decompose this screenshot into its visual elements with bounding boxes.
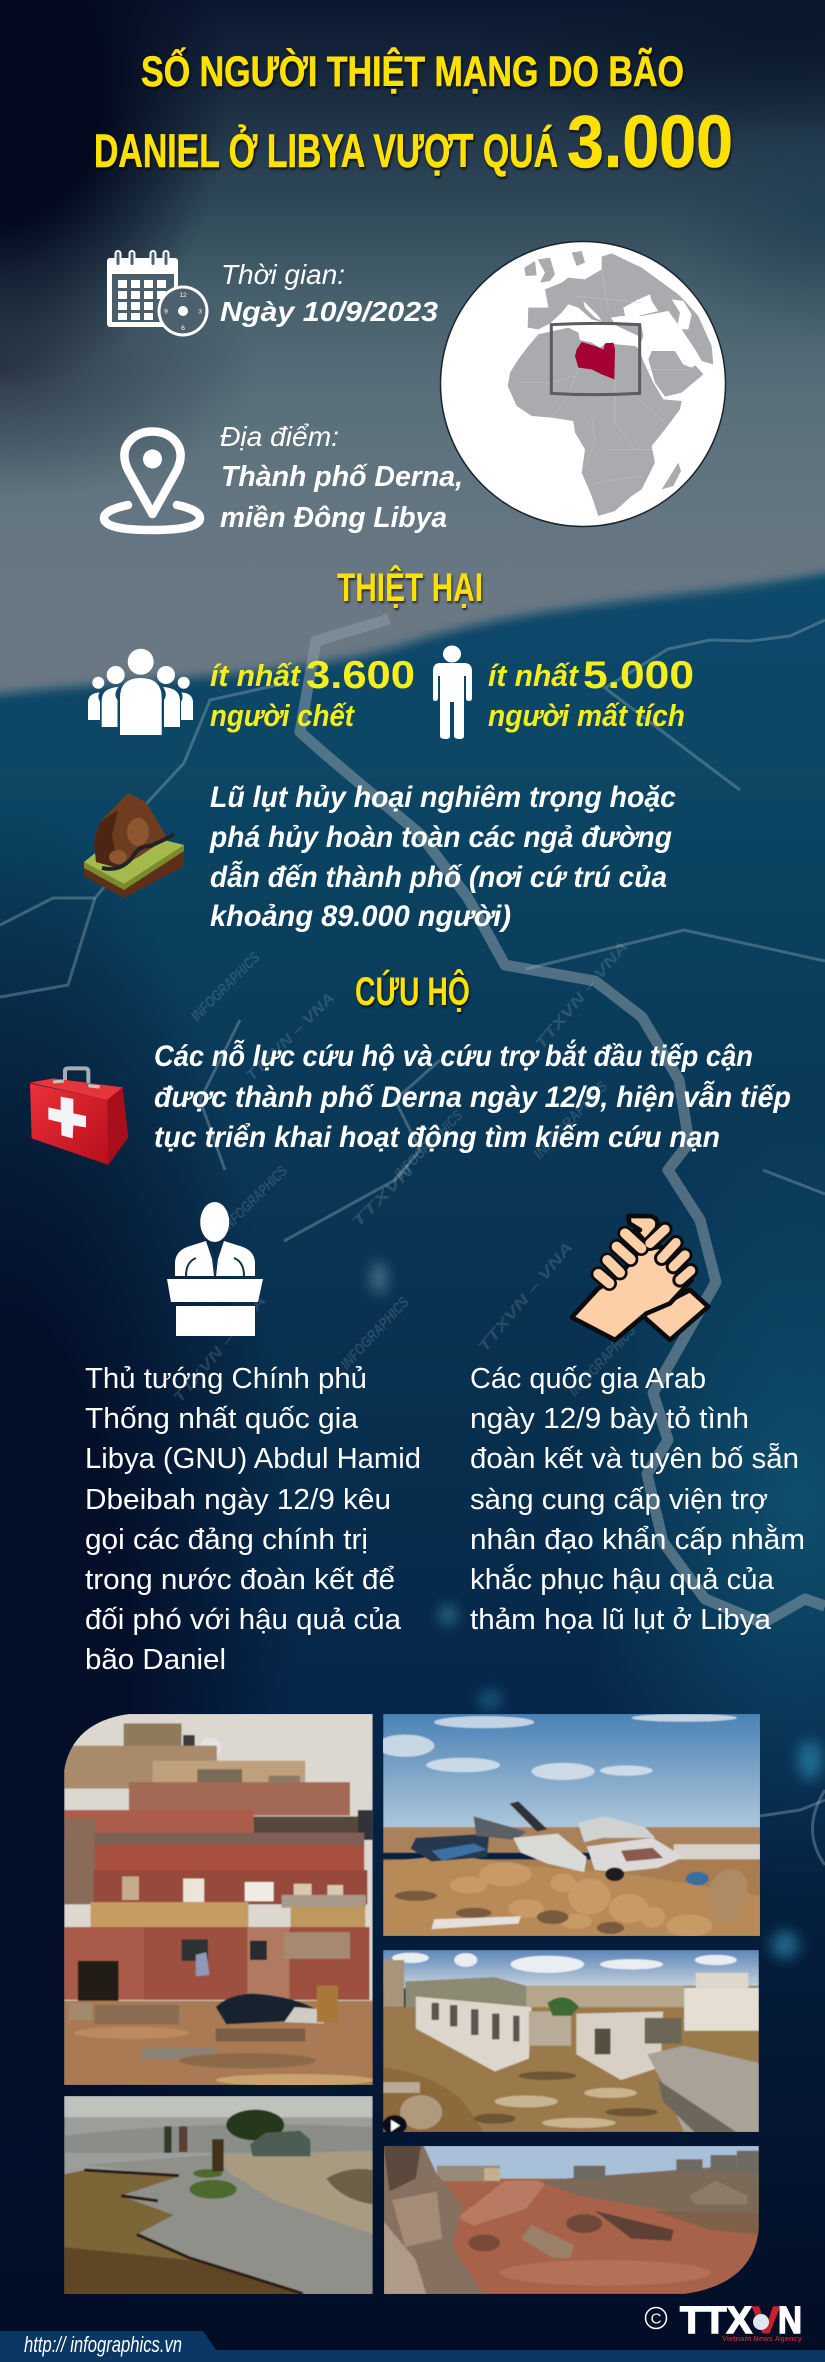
text: time: Thời gian: bbox=[221, 259, 345, 290]
icon: speaker at podium bbox=[167, 1202, 263, 1336]
photo: muddy river of debris bbox=[384, 2146, 759, 2294]
title: DANIEL Ở LIBYA VƯỢT QUÁ bbox=[94, 124, 558, 177]
icon: calendar and clock: 3 bbox=[198, 308, 202, 316]
text: damage description: khoảng 89.000 người) bbox=[210, 900, 511, 933]
text: prime minister statement: bão Daniel bbox=[85, 1644, 226, 1676]
text: time bbox=[220, 259, 438, 327]
text: time: Ngày 10/9/2023 bbox=[220, 296, 438, 327]
text: rescue description: Các nỗ lực cứu hộ và cứu trợ bắt đầu tiếp cận bbox=[154, 1039, 753, 1073]
text: prime minister statement: Thống nhất quốc gia bbox=[85, 1403, 359, 1435]
text: Arab states statement: thảm họa lũ lụt ở Libya bbox=[470, 1604, 772, 1636]
heading: rescue: CỨU HỘ bbox=[355, 968, 470, 1014]
watermarks: TTXVN – VNA bbox=[532, 938, 632, 1053]
map: globe with Libya highlighted bbox=[440, 242, 726, 526]
text: damage description bbox=[209, 781, 676, 933]
text: prime minister statement: Dbeibah ngày 12/9 kêu bbox=[85, 1484, 391, 1516]
icon: landslide over road bbox=[84, 793, 184, 898]
text: rescue description bbox=[154, 1039, 791, 1154]
text: Arab states statement: khắc phục hậu quả của bbox=[470, 1563, 775, 1596]
text: rescue description: được thành phố Derna ngày 12/9, hiện vẫn tiếp bbox=[154, 1080, 791, 1114]
icon: first aid kit bbox=[30, 1068, 128, 1165]
footer bar: http:// infographics.vn bbox=[24, 2332, 182, 2357]
text: prime minister statement: Libya (GNU) Abdul Hamid bbox=[85, 1443, 421, 1475]
icon: location pin bbox=[104, 432, 200, 530]
text: rescue description: tục triển khai hoạt động tìm kiếm cứu nạn bbox=[154, 1121, 720, 1154]
text: prime minister statement: gọi các đảng chính trị bbox=[85, 1524, 368, 1556]
photo: wrecked cars on rubble bbox=[376, 1714, 761, 1937]
stat: dead: người chết bbox=[210, 698, 355, 733]
logo: TTXVN: N bbox=[778, 2300, 802, 2342]
stat: dead: ít nhất bbox=[210, 658, 302, 693]
icon: group of people bbox=[88, 649, 193, 735]
icon: person bbox=[433, 646, 472, 739]
text: Arab states statement: Các quốc gia Arab bbox=[470, 1363, 706, 1395]
photo: flood-damaged street bbox=[383, 1950, 759, 2135]
watermarks: TTXVN bbox=[349, 1161, 419, 1231]
text: Arab states statement: nhân đạo khẩn cấp nhằm bbox=[470, 1523, 805, 1556]
text: prime minister statement: đối phó với hậu quả của bbox=[85, 1604, 402, 1636]
stat: dead bbox=[210, 654, 415, 733]
text: location: Địa điểm: bbox=[220, 421, 339, 452]
icon: clasped hands bbox=[572, 1216, 708, 1340]
watermarks: INFOGRAPHICS bbox=[219, 1163, 291, 1235]
watermarks: TTXVN – VNA bbox=[475, 1239, 577, 1356]
icon: calendar and clock: 9 bbox=[164, 308, 168, 316]
logo: TTXVN: Vietnam News Agency bbox=[722, 2334, 803, 2343]
watermarks: INFOGRAPHICS bbox=[565, 1322, 639, 1400]
background: deep-blue lower sky bbox=[0, 568, 825, 2362]
photo: collapsed road bbox=[64, 2096, 373, 2294]
stat: missing: ít nhất bbox=[488, 658, 580, 693]
logo: TTXVN: V bbox=[752, 2300, 781, 2342]
watermarks: INFOGRAPHICS bbox=[337, 1294, 413, 1373]
photo: damaged building bbox=[64, 1714, 374, 2086]
logo: TTXVN: C bbox=[651, 2310, 662, 2328]
title bbox=[94, 47, 733, 183]
stat: dead: 3.600 bbox=[306, 654, 415, 697]
footer bar bbox=[0, 2331, 825, 2362]
text: damage description: Lũ lụt hủy hoại nghiêm trọng hoặc bbox=[210, 781, 676, 814]
text: Arab states statement: sàng cung cấp viện trợ bbox=[470, 1484, 768, 1516]
text: prime minister statement bbox=[85, 1363, 421, 1676]
stat: missing bbox=[488, 654, 694, 733]
stat: missing: người mất tích bbox=[488, 698, 685, 733]
text: damage description: phá hủy hoàn toàn các ngả đường bbox=[209, 821, 672, 854]
watermarks bbox=[170, 938, 639, 1407]
title: SỐ NGƯỜI THIỆT MẠNG DO BÃO bbox=[141, 47, 684, 96]
heading: damage: THIỆT HẠI bbox=[337, 564, 483, 610]
icon: calendar and clock bbox=[107, 251, 208, 336]
lightning bolts bbox=[0, 619, 825, 1959]
text: location: miền Đông Libya bbox=[220, 502, 447, 534]
logo: TTXVN bbox=[646, 2300, 803, 2343]
stat: missing: 5.000 bbox=[583, 654, 694, 697]
icon: calendar and clock: 12 bbox=[179, 292, 187, 299]
icon: calendar and clock: 6 bbox=[181, 325, 185, 332]
text: Arab states statement: đoàn kết và tuyên bố sẵn bbox=[470, 1442, 799, 1475]
text: location bbox=[220, 421, 463, 534]
text: damage description: dẫn đến thành phố (nơi cứ trú của bbox=[210, 860, 667, 894]
watermarks: TTXVN – VNA bbox=[243, 989, 338, 1085]
text: prime minister statement: Thủ tướng Chính phủ bbox=[85, 1363, 367, 1395]
watermarks: TTXVN – VNA bbox=[170, 1292, 270, 1407]
text: Arab states statement bbox=[470, 1363, 805, 1636]
watermarks: INFOGRAPHICS bbox=[391, 1107, 466, 1183]
title: 3.000 bbox=[567, 100, 733, 183]
text: prime minister statement: trong nước đoàn kết để bbox=[85, 1564, 395, 1596]
logo: TTXVN: TTX bbox=[680, 2300, 753, 2342]
text: location: Thành phố Derna, bbox=[221, 461, 463, 493]
watermarks: INFOGRAPHICS bbox=[188, 949, 263, 1025]
text: Arab states statement: ngày 12/9 bày tỏ tình bbox=[470, 1403, 749, 1435]
watermarks: INFOGRAPHICS bbox=[530, 1078, 611, 1163]
